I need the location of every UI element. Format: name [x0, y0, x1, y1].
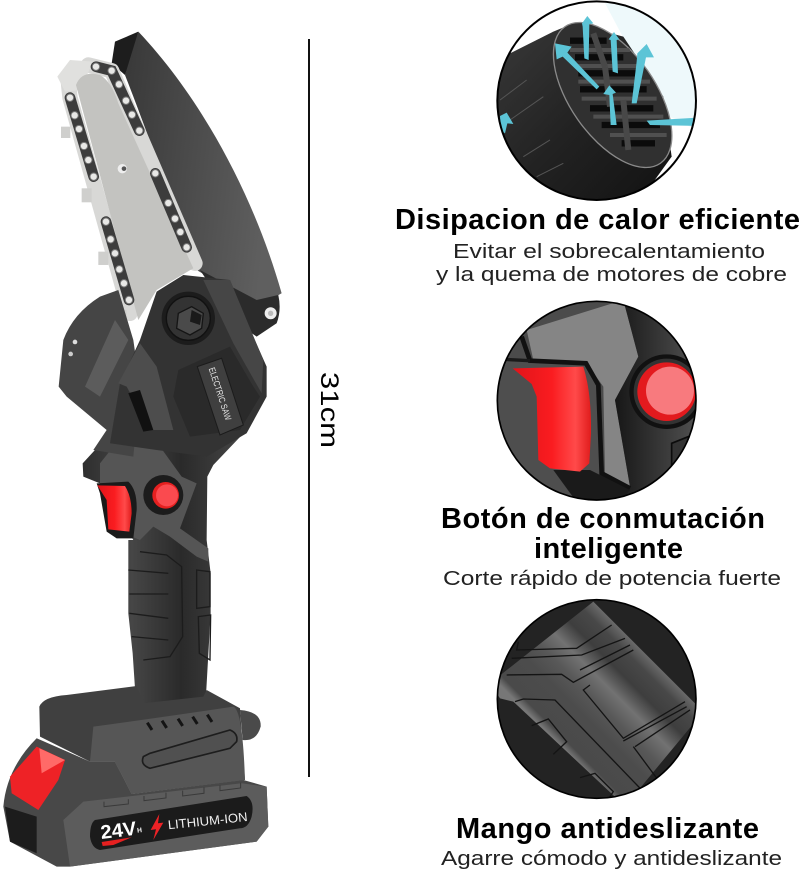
heading: heat dissipation: Disipacion de calor eficiente [395, 204, 800, 236]
product: mini chainsaw [3, 32, 282, 867]
label: electric saw [197, 358, 243, 435]
photo: trigger and safety button [496, 300, 697, 501]
main side cover [110, 275, 267, 457]
trigger, red [513, 367, 591, 472]
label: electric saw: ELECTRIC SAW [207, 366, 233, 422]
battery upper [39, 686, 261, 794]
guide bar and chain [57, 60, 195, 323]
text: heat dissipation description: y la quema de motores de cobre [436, 264, 787, 286]
power button [143, 475, 183, 515]
trigger [97, 482, 137, 538]
saw upper: guard, bar, chain and motor housing [57, 32, 282, 457]
text: heat dissipation description [436, 241, 787, 286]
photo: heat dissipation vents [496, 0, 697, 201]
dimension label: 31cm [315, 372, 343, 448]
text: anti-slip description: Agarre cómodo y antideslizante [441, 848, 782, 870]
button, red [630, 354, 696, 429]
battery lower [3, 738, 268, 867]
heading: smart switch: inteligente [534, 533, 683, 565]
heading: smart switch [441, 503, 765, 565]
battery label: 24V lithium-ion: 24V [99, 819, 138, 844]
battery label: 24V lithium-ion: H [137, 827, 143, 835]
text: heat dissipation description: Evitar el sobrecalentamiento [453, 241, 765, 263]
heading: anti-slip handle: Mango antideslizante [456, 813, 759, 845]
battery label: 24V lithium-ion [90, 796, 253, 850]
handle grip [83, 430, 247, 713]
text: smart switch description: Corte rápido de potencia fuerte [443, 568, 781, 590]
motor housing [59, 290, 140, 457]
photo: anti-slip handle [490, 600, 703, 808]
heading: smart switch: Botón de conmutación [441, 503, 765, 535]
battery label: 24V lithium-ion: LITHIUM-ION [167, 810, 248, 832]
saw lower: handle and battery [3, 430, 268, 867]
blade guard [112, 32, 282, 337]
